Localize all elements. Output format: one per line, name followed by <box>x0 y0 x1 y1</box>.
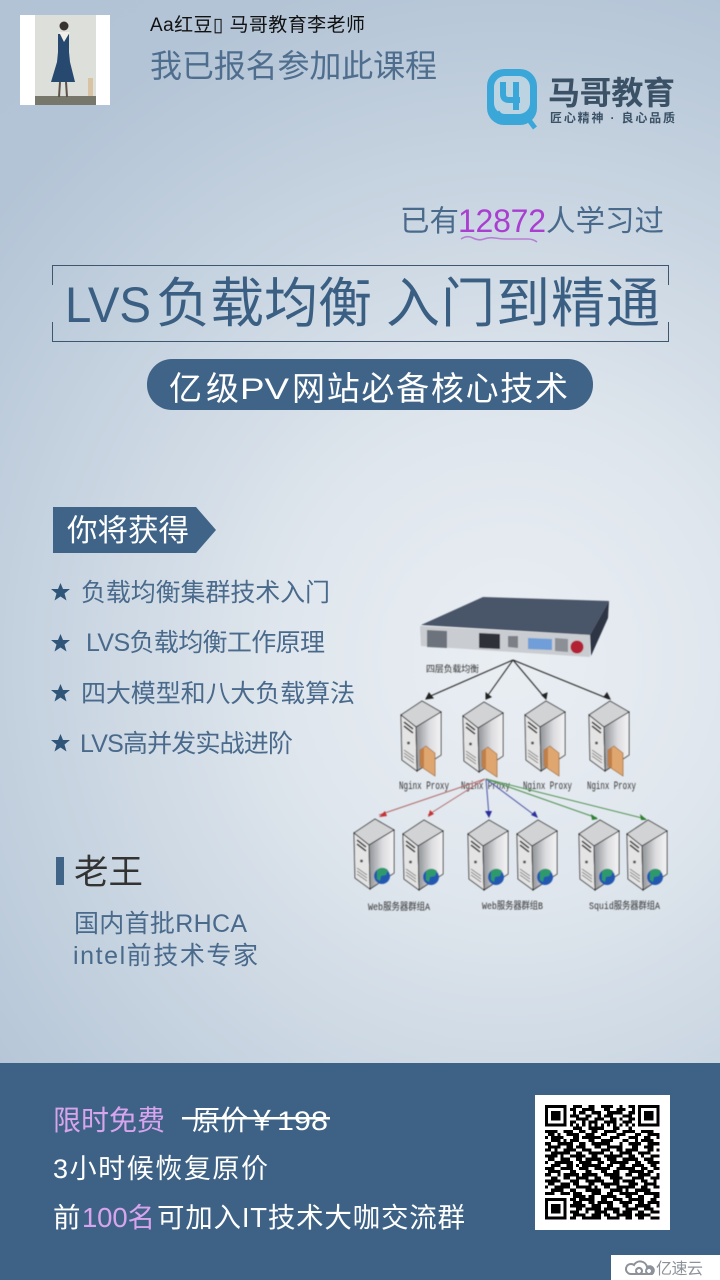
QR code <box>535 1095 670 1230</box>
subtitle pill: 亿级 <box>169 370 239 407</box>
logo: 马哥教育 <box>487 69 675 128</box>
user name: Aa红豆▯ 马哥教育李老师 <box>150 14 365 36</box>
watermark name: 亿速云 <box>656 1260 703 1278</box>
offer line: 198 <box>277 1106 328 1136</box>
benefit 1: 负载均衡集群技术入门 <box>81 579 330 607</box>
bottom band <box>0 1063 720 1280</box>
teacher name: 老王 <box>74 854 143 892</box>
arrows to proxies <box>426 660 610 699</box>
network diagram <box>354 597 667 914</box>
teacher name marker <box>56 857 64 885</box>
main title: LVS <box>65 277 151 333</box>
proxy labels: Nginx Proxy <box>523 781 572 793</box>
main title: 入门到精通 <box>386 274 660 334</box>
offer duration: 3小时候恢复原价 <box>53 1154 268 1184</box>
section tag: 你将获得 <box>53 507 216 553</box>
learner count: 12872 <box>458 203 546 239</box>
watermark cloud <box>626 1261 654 1274</box>
logo slogan: 匠心精神 · 良心品质 <box>550 110 675 125</box>
teacher block <box>56 854 258 970</box>
section tag: 你将获得: 你将获得 <box>67 514 189 548</box>
proxy labels: Nginx Proxy <box>399 781 449 793</box>
offer group: 可加入IT技术大咖交流群 <box>157 1202 465 1233</box>
benefit 3: 四大模型和八大负载算法 <box>81 680 355 708</box>
main title <box>65 274 660 334</box>
logo wordmark: 马哥教育 <box>548 75 675 111</box>
offer group: 100名 <box>82 1202 155 1233</box>
subtitle pill: PV <box>240 373 289 406</box>
appliance caption: 四层负载均衡 <box>426 663 479 674</box>
teacher credential 1: 国内首批RHCA <box>74 910 247 938</box>
load balancer appliance <box>420 597 609 657</box>
arrows to web groups <box>379 779 647 820</box>
main title: 负载均衡 <box>156 274 372 334</box>
offer line: 原价￥ <box>192 1105 276 1136</box>
enrolled notice: 我已报名参加此课程 <box>150 48 437 84</box>
title frame <box>52 266 668 342</box>
web servers <box>354 819 667 890</box>
web group labels: Web服务器群组B <box>482 899 543 913</box>
web group labels: Web服务器群组A <box>368 900 430 914</box>
proxy labels <box>399 781 636 793</box>
subtitle pill <box>147 359 593 410</box>
offer line: 限时免费 <box>53 1105 165 1136</box>
proxy servers <box>401 701 629 777</box>
proxy labels: Nginx Proxy <box>461 781 510 793</box>
learner count <box>400 203 664 242</box>
logo icon <box>487 69 537 128</box>
proxy labels: Nginx Proxy <box>587 781 636 793</box>
teacher credential 2: intel前技术专家 <box>73 942 258 970</box>
benefit list <box>51 579 355 758</box>
benefit 4: LVS高并发实战进阶 <box>80 730 293 758</box>
learner count: 已有 <box>400 205 459 238</box>
offer group: 前 <box>53 1202 80 1233</box>
offer line <box>53 1105 330 1136</box>
web group labels: Squid服务器群组A <box>589 899 660 913</box>
subtitle pill: 网站必备核心技术 <box>292 370 568 407</box>
learner count: 人学习过 <box>546 205 664 238</box>
watermark <box>611 1255 720 1280</box>
benefit 2: LVS负载均衡工作原理 <box>86 629 325 657</box>
avatar photo <box>20 15 110 105</box>
web group labels <box>368 899 660 914</box>
